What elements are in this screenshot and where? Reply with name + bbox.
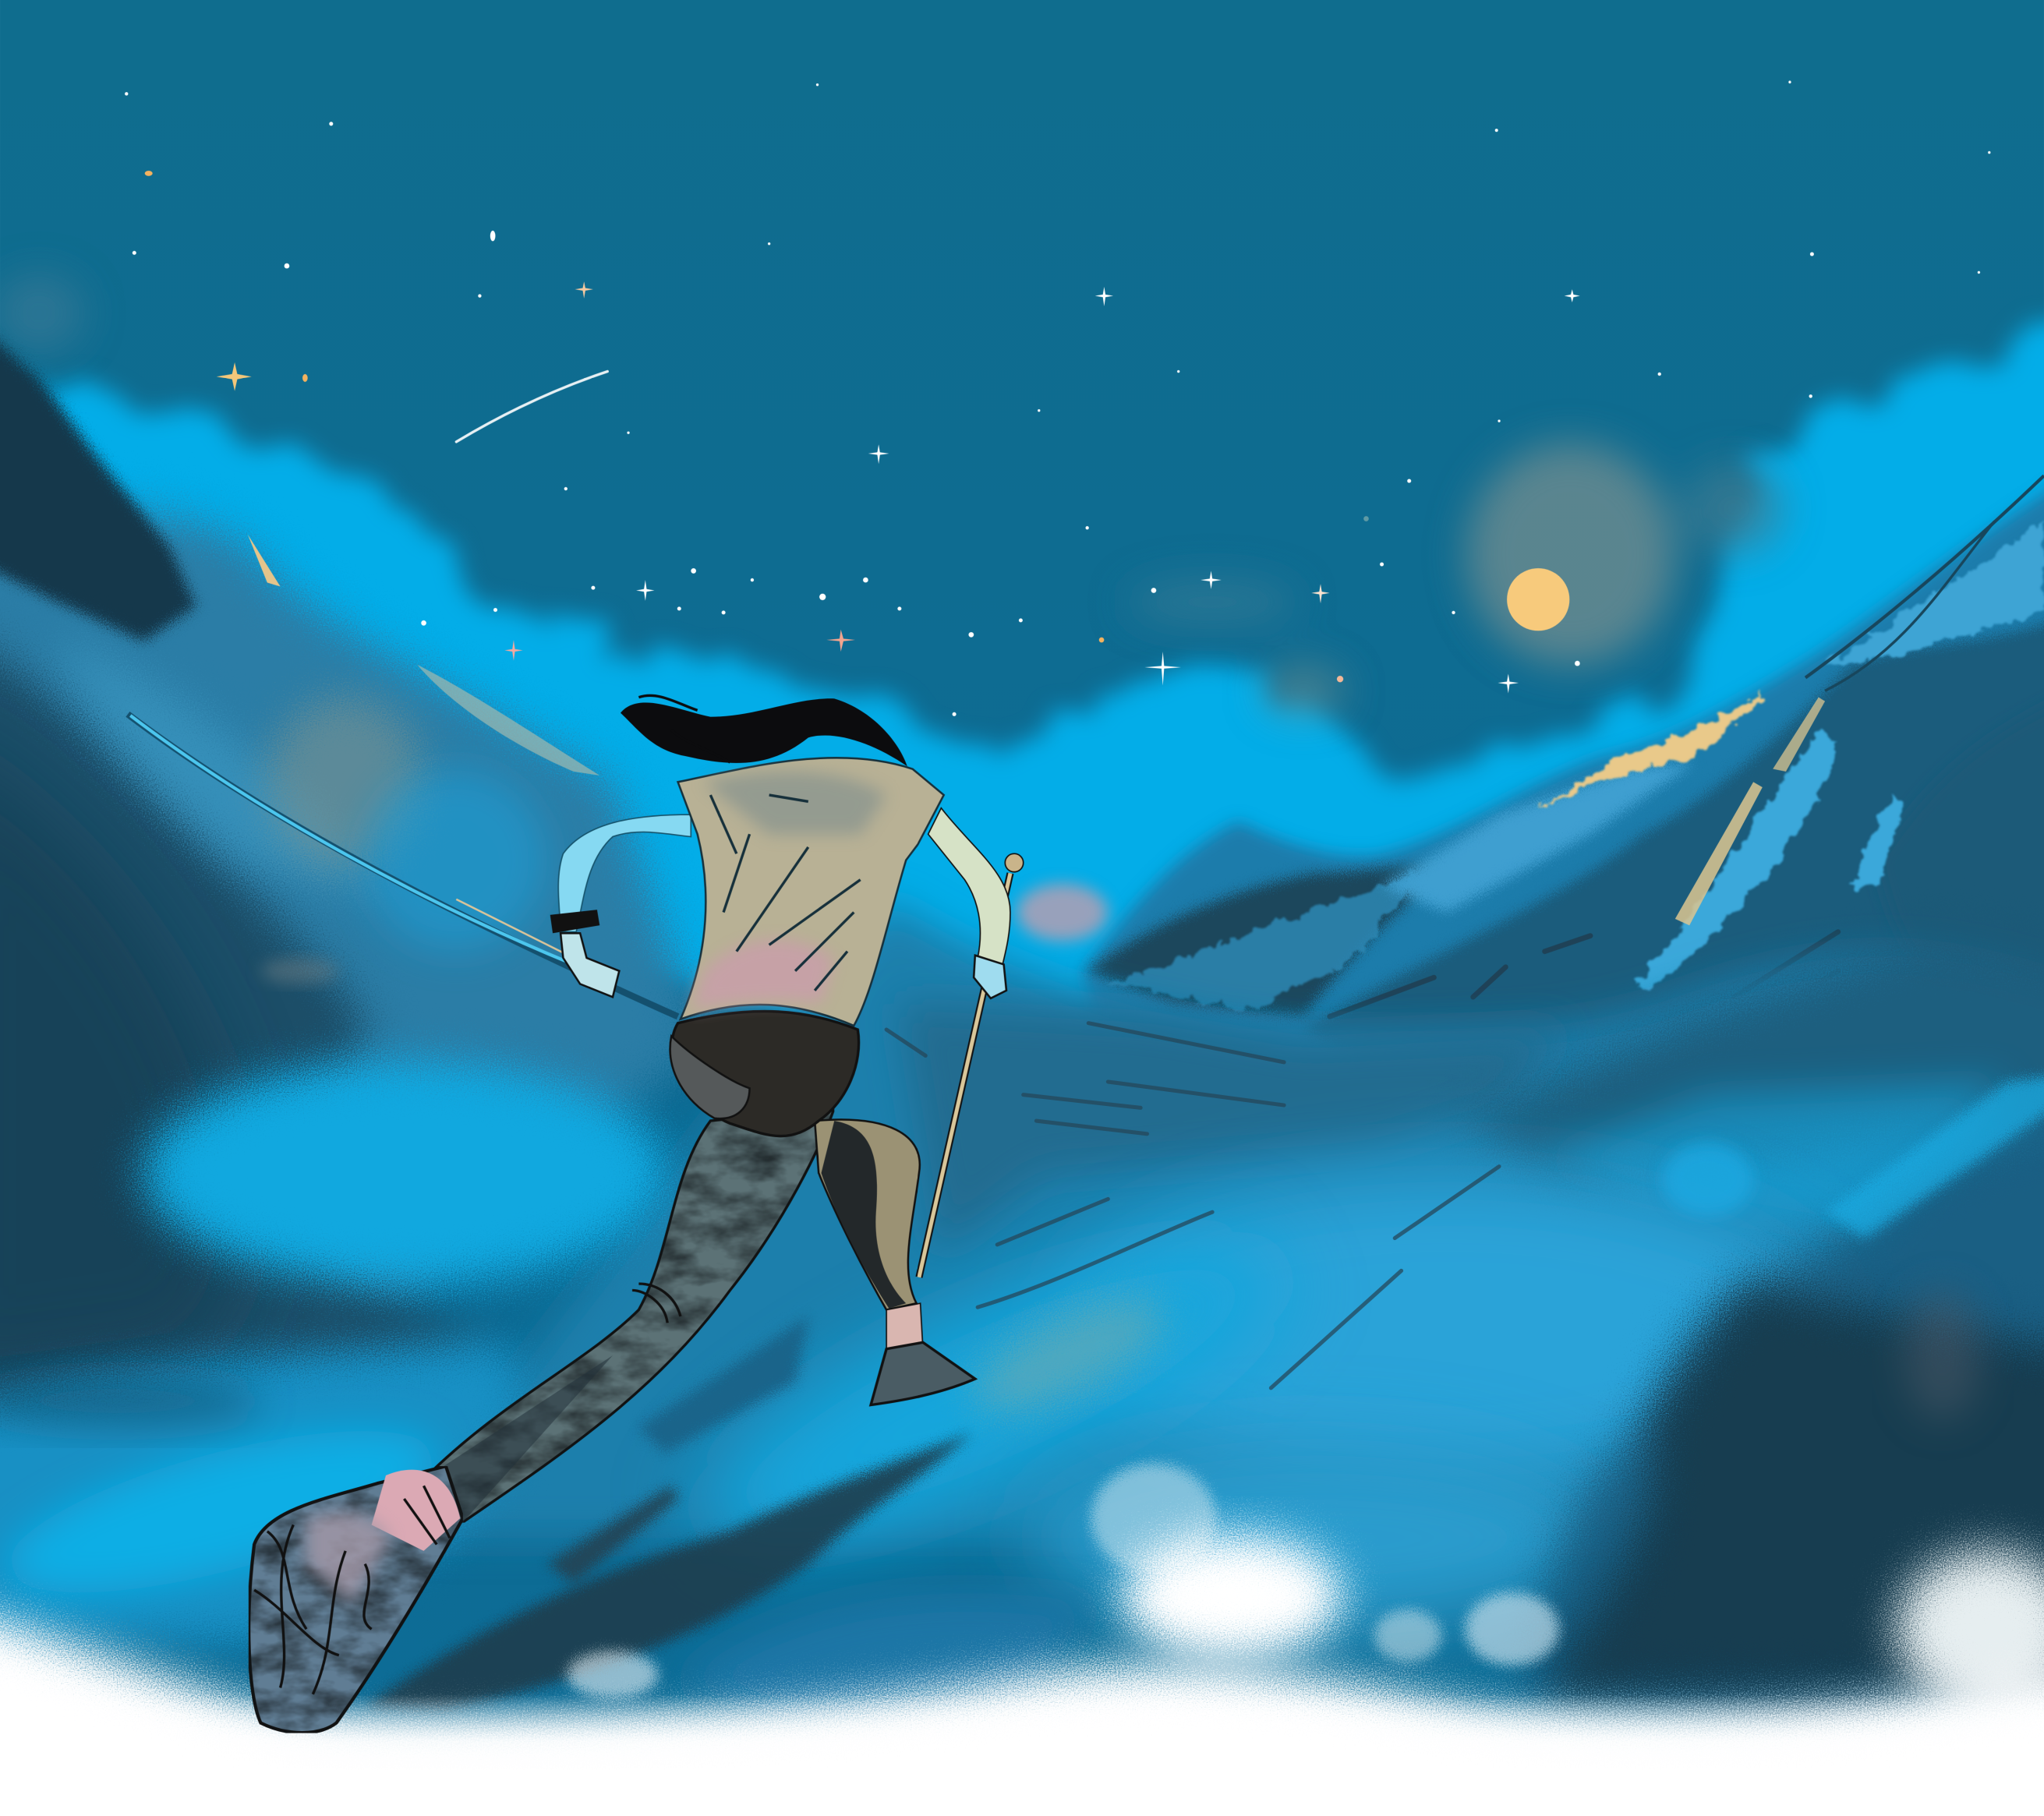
front shoe [886,1303,923,1355]
moon [1507,568,1569,631]
moon glow clouds [0,274,1784,717]
runner [128,695,1024,1733]
clouds: bright cyan band [0,293,2044,1016]
shooting star [456,372,607,442]
mountains: left slope [0,300,704,1414]
trekking pole: right [919,853,1024,1277]
shorts [672,1012,859,1136]
arm: right [928,808,1010,971]
dark rocks lower right [1525,1069,2044,1733]
valley brush strokes [886,1023,1499,1388]
mist lower left [0,1316,808,1642]
stars [125,81,1990,716]
mountains: right range [1082,450,2044,1303]
back leg [423,1108,834,1522]
white snow clouds [0,1464,2044,1816]
back shoe [249,1466,463,1733]
hair [621,698,907,766]
trekking pole: left [128,714,678,1016]
front leg [815,1119,920,1310]
arm: left [558,814,691,932]
valley floor and mist [143,884,2044,1629]
dark brush streaks on the trail [365,1433,1095,1720]
t-shirt [678,758,944,1026]
